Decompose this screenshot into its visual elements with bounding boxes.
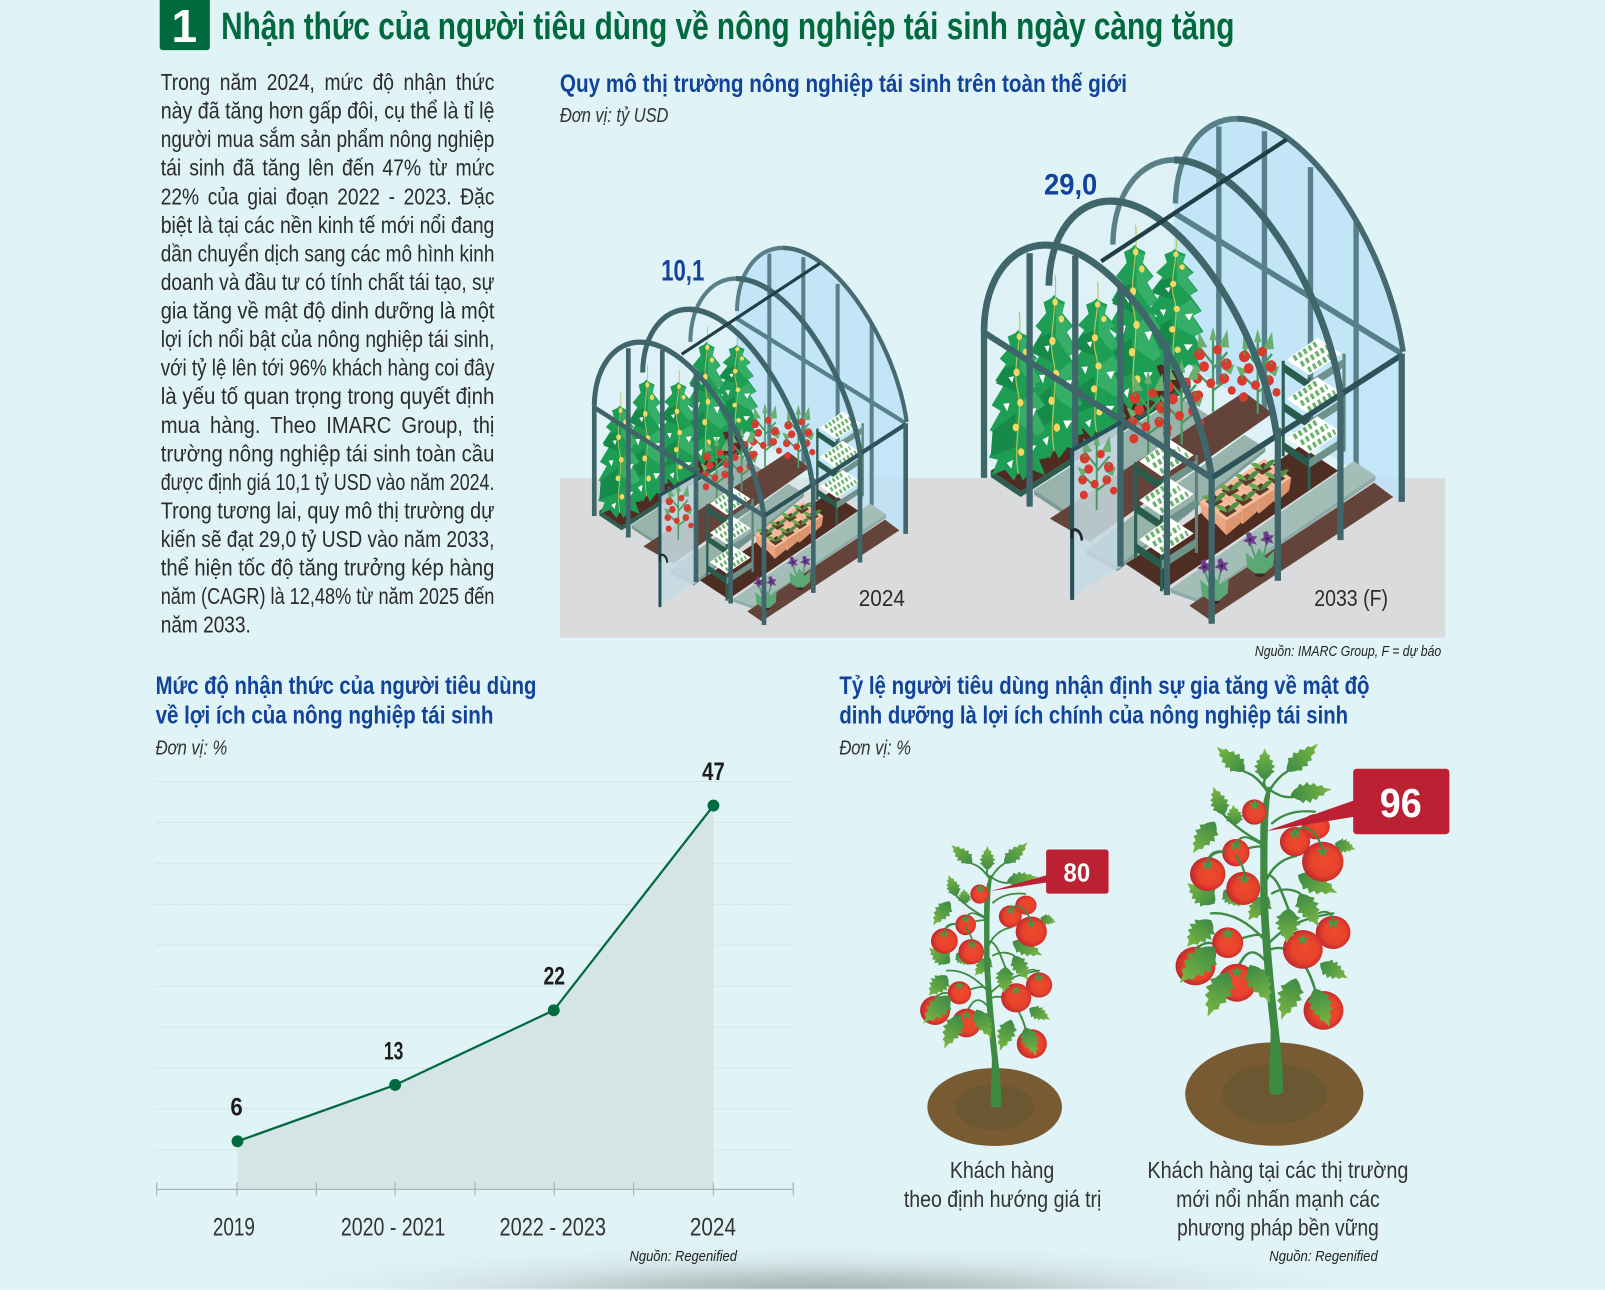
year label 2033: 2033 (F) bbox=[1314, 585, 1388, 611]
body text: lợi ích nổi bật của nông nghiệp tái sinh, bbox=[161, 326, 494, 352]
unit: market size: Đơn vị: tỷ USD bbox=[560, 104, 669, 127]
bottom edge line bbox=[0, 1289, 1605, 1290]
body text: với tỷ lệ lên tới 96% khách hàng coi đây bbox=[161, 355, 495, 381]
line chart bbox=[156, 759, 793, 1241]
heading: market size: Quy mô thị trường nông nghiệp tái sinh trên toàn thế giới bbox=[560, 70, 1127, 98]
value labels: 13 bbox=[384, 1038, 403, 1065]
body text: doanh và đầu tư có tính chất tái tạo, sự bbox=[161, 269, 494, 295]
body text: Trong năm 2024, mức độ nhận thức bbox=[161, 69, 494, 95]
callout 96: 96 bbox=[1380, 780, 1422, 826]
body text: năm 2033. bbox=[161, 612, 251, 638]
body text: được định giá 10,1 tỷ USD vào năm 2024. bbox=[161, 469, 494, 495]
heading: awareness chart: về lợi ích của nông nghiệp tái sinh bbox=[156, 702, 493, 730]
unit: awareness chart: Đơn vị: % bbox=[156, 736, 227, 759]
caption: emerging market customers bbox=[1147, 1157, 1408, 1240]
axis labels: 2020 - 2021 bbox=[341, 1214, 445, 1241]
body text: gia tăng về mật độ dinh dưỡng là một bbox=[161, 298, 495, 324]
axis labels bbox=[213, 1214, 736, 1241]
value labels: 22 bbox=[544, 964, 565, 991]
body text: Trong tương lai, quy mô thị trường dự bbox=[161, 497, 494, 523]
source: nutrient density: Nguồn: Regenified bbox=[1269, 1249, 1379, 1265]
greenhouse 2024 bbox=[594, 248, 907, 625]
greenhouse 2033 bbox=[984, 119, 1403, 624]
body text: người mua sắm sản phẩm nông nghiệp bbox=[161, 126, 494, 152]
source: awareness chart: Nguồn: Regenified bbox=[630, 1249, 738, 1265]
heading: nutrient density: Tỷ lệ người tiêu dùng nhận định sự gia tăng về mật độ bbox=[839, 672, 1370, 700]
body text: thể hiện tốc độ tăng trưởng kép hàng bbox=[161, 555, 494, 581]
callout 80: 80 bbox=[1064, 859, 1090, 887]
body text: tái sinh đã tăng lên đến 47% từ mức bbox=[161, 155, 494, 181]
area under line bbox=[237, 806, 713, 1189]
body text: mua hàng. Theo IMARC Group, thị bbox=[161, 412, 494, 438]
body text bbox=[161, 69, 495, 638]
value labels: 6 bbox=[230, 1095, 243, 1122]
body text: dần chuyển dịch sang các mô hình kinh bbox=[161, 240, 494, 266]
heading: nutrient density bbox=[839, 672, 1370, 730]
caption: value-oriented customers: Khách hàng bbox=[950, 1157, 1054, 1183]
callout 96 bbox=[1266, 769, 1449, 834]
title: Nhận thức của người tiêu dùng về nông nghiệp tái sinh ngày càng tăng bbox=[221, 6, 1234, 48]
unit: nutrient density: Đơn vị: % bbox=[839, 736, 911, 759]
data line bbox=[237, 806, 713, 1141]
value 10,1: 10,1 bbox=[661, 254, 704, 287]
section number badge bbox=[160, 0, 210, 52]
body text: trường nông nghiệp tái sinh toàn cầu bbox=[161, 440, 494, 466]
axis labels: 2019 bbox=[213, 1214, 255, 1241]
value 29,0: 29,0 bbox=[1044, 168, 1097, 201]
source: market size: Nguồn: IMARC Group, F = dự báo bbox=[1255, 644, 1441, 660]
body text: 22% của giai đoạn 2022 - 2023. Đặc bbox=[161, 183, 494, 209]
data points bbox=[232, 800, 719, 1147]
callout 80 bbox=[991, 850, 1109, 894]
tomato plant small bbox=[914, 837, 1062, 1146]
heading: awareness chart bbox=[156, 672, 536, 730]
section number badge: 1 bbox=[171, 0, 197, 52]
axis labels: 2024 bbox=[690, 1214, 736, 1241]
tomato plant large bbox=[1168, 737, 1363, 1146]
axis labels: 2022 - 2023 bbox=[500, 1214, 606, 1241]
body text: là yếu tố quan trọng trong quyết định bbox=[161, 383, 494, 409]
heading: awareness chart: Mức độ nhận thức của người tiêu dùng bbox=[156, 672, 536, 700]
floor band bbox=[560, 478, 1445, 638]
caption: emerging market customers: Khách hàng tại các thị trường bbox=[1147, 1157, 1408, 1183]
bottom shadow bbox=[235, 1243, 1402, 1290]
caption: value-oriented customers bbox=[904, 1157, 1101, 1212]
year label 2024: 2024 bbox=[859, 585, 905, 611]
value labels: 47 bbox=[702, 759, 725, 786]
body text: biệt là tại các nền kinh tế mới nổi đang bbox=[161, 212, 494, 238]
value labels bbox=[230, 759, 725, 1122]
body text: này đã tăng hơn gấp đôi, cụ thể là tỉ lệ bbox=[161, 98, 494, 124]
body text: năm (CAGR) là 12,48% từ năm 2025 đến bbox=[161, 583, 494, 609]
body text: kiến sẽ đạt 29,0 tỷ USD vào năm 2033, bbox=[161, 526, 494, 552]
caption: emerging market customers: mới nổi nhấn mạnh các bbox=[1176, 1186, 1380, 1212]
caption: emerging market customers: phương pháp bền vững bbox=[1177, 1214, 1379, 1240]
caption: value-oriented customers: theo định hướng giá trị bbox=[904, 1186, 1101, 1212]
heading: nutrient density: dinh dưỡng là lợi ích chính của nông nghiệp tái sinh bbox=[839, 702, 1348, 730]
